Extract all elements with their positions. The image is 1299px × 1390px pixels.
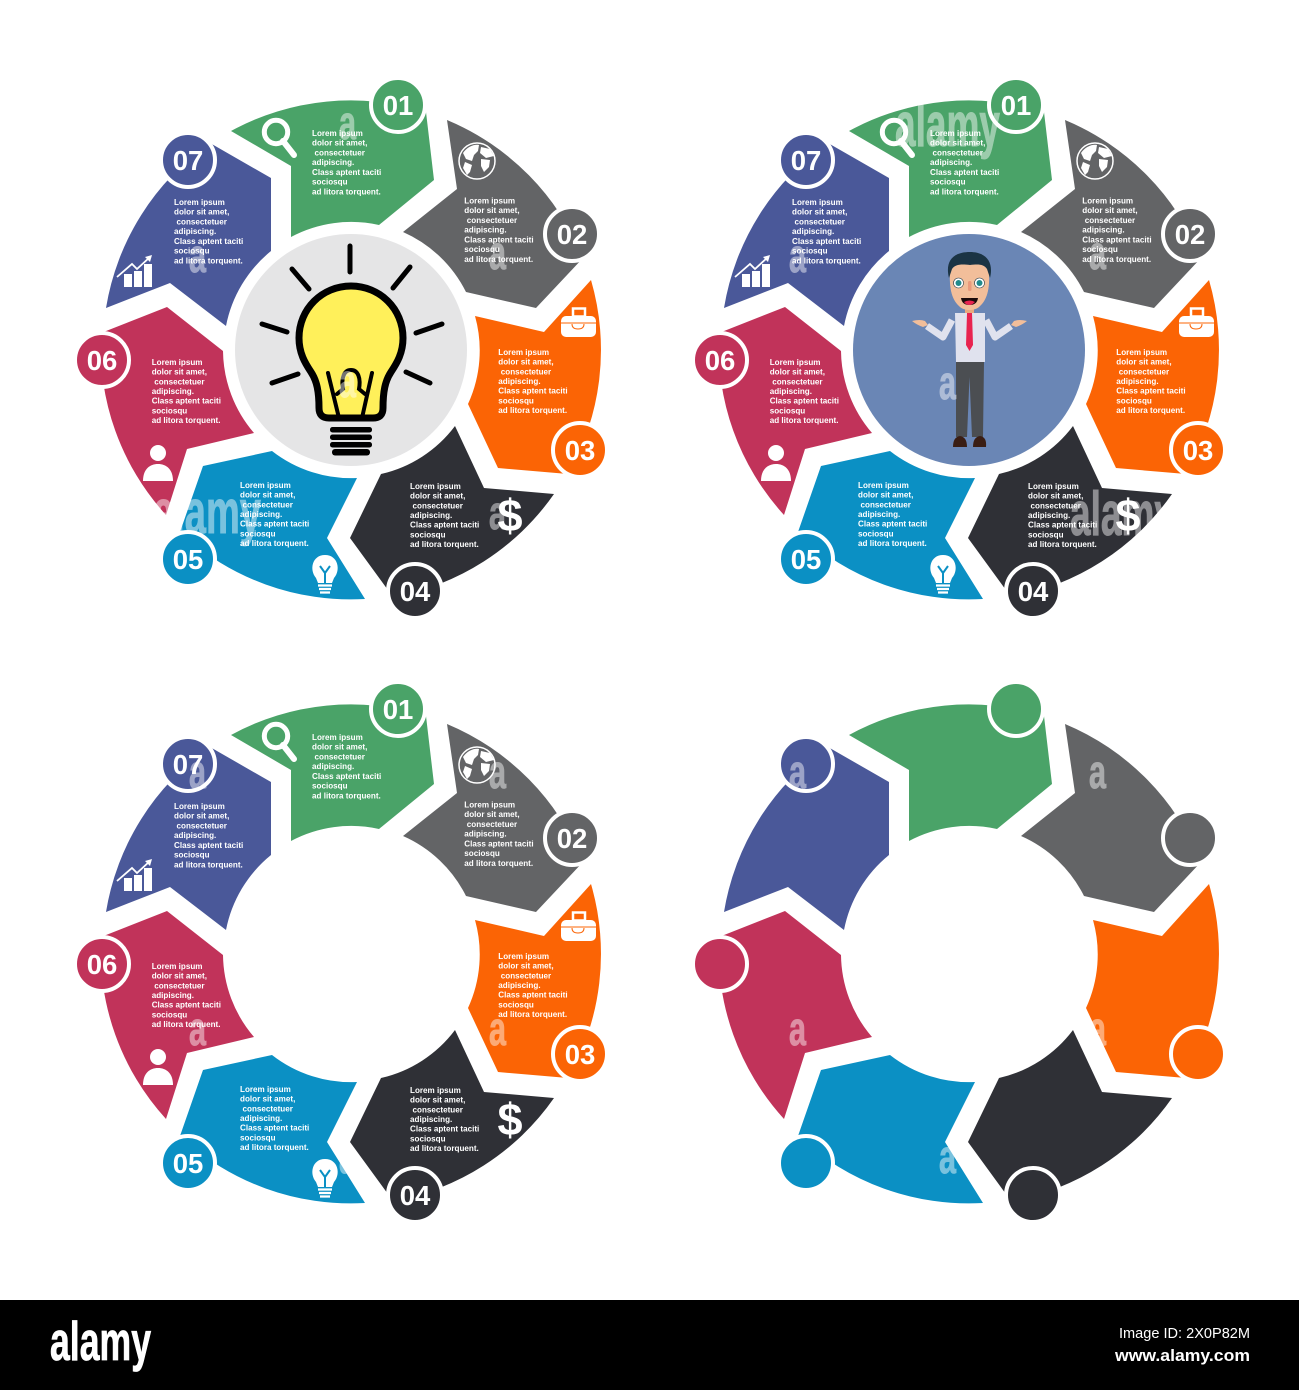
segment 03: ad litora torquent. xyxy=(498,406,567,415)
segment 02: sociosqu xyxy=(1082,245,1118,254)
segment 03: sociosqu xyxy=(498,1000,534,1009)
segment 01: ad litora torquent. xyxy=(312,187,381,196)
segment 06: ad litora torquent. xyxy=(152,416,220,425)
segment 05 xyxy=(161,451,365,599)
segment 05: consectetuer xyxy=(242,500,294,509)
segment 03: adipiscing. xyxy=(498,377,541,386)
stock photo watermarks: a xyxy=(489,745,507,798)
segment 04: $ xyxy=(497,1094,523,1145)
stock photo watermarks: a xyxy=(939,356,957,409)
segment 01: dolor sit amet, xyxy=(312,139,367,148)
segment 04: adipiscing. xyxy=(1028,511,1070,520)
segment 04: consectetuer xyxy=(412,501,464,510)
segment 05: adipiscing. xyxy=(240,1114,282,1123)
segment 06: dolor sit amet, xyxy=(152,368,207,377)
segment 03: dolor sit amet, xyxy=(498,962,554,971)
segment 06 xyxy=(693,307,872,515)
segment 01: consectetuer xyxy=(314,148,366,157)
segment 04: dolor sit amet, xyxy=(410,492,465,501)
segment 04: $ xyxy=(1115,490,1141,541)
segment 03: 03 xyxy=(565,435,595,466)
segment 07: Class aptent taciti xyxy=(792,237,861,246)
segment 07: ad litora torquent. xyxy=(792,256,861,265)
segment 01 xyxy=(231,78,434,237)
segment 03: consectetuer xyxy=(501,971,552,980)
diagram 1: ring with lightbulb centre xyxy=(75,78,607,618)
segment 03: sociosqu xyxy=(1116,396,1152,405)
segment 02: dolor sit amet, xyxy=(1082,206,1138,215)
centre disc with businessman xyxy=(853,234,1085,466)
segment 01: consectetuer xyxy=(932,148,984,157)
segment 04: dolor sit amet, xyxy=(1028,492,1083,501)
segment 01: Lorem ipsum xyxy=(312,129,363,138)
segment 02: 02 xyxy=(557,823,587,854)
segment 03: 03 xyxy=(1183,435,1213,466)
segment 06: dolor sit amet, xyxy=(152,972,207,981)
segment 01: adipiscing. xyxy=(312,762,354,771)
segment 02: ad litora torquent. xyxy=(1082,255,1151,264)
segment 05: adipiscing. xyxy=(240,510,282,519)
segment 02: ad litora torquent. xyxy=(464,255,533,264)
segment 01: Class aptent taciti xyxy=(930,168,999,177)
segment 06: adipiscing. xyxy=(770,387,812,396)
segment 06: 06 xyxy=(87,345,117,376)
segment 05: ad litora torquent. xyxy=(240,539,309,548)
stock photo watermarks: a xyxy=(189,229,207,282)
segment 02: adipiscing. xyxy=(464,226,507,235)
segment 06: ad litora torquent. xyxy=(770,416,838,425)
segment 04: Lorem ipsum xyxy=(1028,482,1079,491)
segment 02: Lorem ipsum xyxy=(1082,196,1133,206)
segment 07: dolor sit amet, xyxy=(174,208,229,217)
segment 06: sociosqu xyxy=(152,1010,187,1019)
segment 04: adipiscing. xyxy=(410,511,452,520)
segment 04: Lorem ipsum xyxy=(410,1086,461,1095)
segment 07: Class aptent taciti xyxy=(174,237,243,246)
segment 05: sociosqu xyxy=(858,529,894,538)
stock photo watermarks: a xyxy=(789,229,807,282)
segment 02: Class aptent taciti xyxy=(464,839,534,848)
centre disc with lightbulb xyxy=(235,234,467,466)
segment 01: Class aptent taciti xyxy=(312,772,381,781)
segment 03: consectetuer xyxy=(1119,367,1170,376)
segment 05: Class aptent taciti xyxy=(858,520,927,529)
segment 04: Lorem ipsum xyxy=(410,482,461,491)
segment 02: sociosqu xyxy=(464,245,500,254)
blank segment 06 xyxy=(693,911,872,1119)
segment 03: Class aptent taciti xyxy=(1116,387,1186,396)
diagram 3: ring with empty centre xyxy=(75,682,607,1222)
segment 04: sociosqu xyxy=(410,1134,446,1143)
segment 03: adipiscing. xyxy=(498,981,541,990)
footer band xyxy=(0,1300,1299,1390)
segment 06 xyxy=(75,911,254,1119)
stock photo watermarks: a xyxy=(939,1130,957,1183)
segment 07: Lorem ipsum xyxy=(792,198,843,207)
segment 01: ad litora torquent. xyxy=(312,791,381,800)
segment 04: 04 xyxy=(1018,576,1049,607)
segment 04: ad litora torquent. xyxy=(410,540,479,549)
segment 02 xyxy=(1021,120,1217,308)
segment 05: 05 xyxy=(173,1148,203,1179)
segment 07: Class aptent taciti xyxy=(174,841,243,850)
segment 07: ad litora torquent. xyxy=(174,860,243,869)
segment 04 xyxy=(968,426,1172,618)
segment 04 xyxy=(350,1030,554,1222)
segment 03: ad litora torquent. xyxy=(498,1010,567,1019)
blank segment 01 xyxy=(849,682,1052,841)
segment 05: 05 xyxy=(173,544,203,575)
segment 07: Lorem ipsum xyxy=(174,802,225,811)
segment 02: consectetuer xyxy=(1085,216,1136,225)
segment 04: $ xyxy=(497,490,523,541)
segment 07: sociosqu xyxy=(792,247,828,256)
segment 06 xyxy=(75,307,254,515)
segment 04: adipiscing. xyxy=(410,1115,452,1124)
segment 07: dolor sit amet, xyxy=(792,208,847,217)
segment 04: consectetuer xyxy=(412,1105,464,1114)
segment 03: 03 xyxy=(565,1039,595,1070)
segment 02: consectetuer xyxy=(467,216,518,225)
segment 05 xyxy=(779,451,983,599)
segment 06: sociosqu xyxy=(770,406,805,415)
segment 05: dolor sit amet, xyxy=(240,491,295,500)
segment 06: Lorem ipsum xyxy=(152,962,203,971)
segment 02: consectetuer xyxy=(467,820,518,829)
segment 01: 01 xyxy=(383,90,413,121)
segment 01: 01 xyxy=(1001,90,1031,121)
segment 03: ad litora torquent. xyxy=(1116,406,1185,415)
stock photo watermarks: a xyxy=(789,1002,807,1055)
segment 03: dolor sit amet, xyxy=(498,358,554,367)
stock photo watermarks: a xyxy=(189,745,207,798)
segment 04: consectetuer xyxy=(1030,501,1082,510)
segment 03: adipiscing. xyxy=(1116,377,1159,386)
segment 07: adipiscing. xyxy=(174,831,216,840)
stock photo watermarks: a xyxy=(339,96,357,149)
segment 04: sociosqu xyxy=(1028,530,1064,539)
segment 01: dolor sit amet, xyxy=(312,743,367,752)
image id: Image ID: 2X0P82M xyxy=(1119,1325,1250,1342)
segment 04: 04 xyxy=(400,576,431,607)
segment 07: 07 xyxy=(173,145,203,176)
stock photo watermarks: a xyxy=(1089,1002,1107,1055)
segment 03: sociosqu xyxy=(498,396,534,405)
segment 07: 07 xyxy=(173,749,203,780)
segment 02: Class aptent taciti xyxy=(464,235,534,244)
segment 01: adipiscing. xyxy=(930,158,972,167)
stock photo watermarks: alamy xyxy=(895,91,1000,160)
segment 01: Lorem ipsum xyxy=(930,129,981,138)
blank segment 02 xyxy=(1021,724,1217,912)
segment 02: ad litora torquent. xyxy=(464,859,533,868)
diagram 2: ring with businessman centre xyxy=(693,78,1225,618)
segment 04: 04 xyxy=(400,1180,431,1211)
segment 07: sociosqu xyxy=(174,851,210,860)
segment 06: adipiscing. xyxy=(152,387,194,396)
segment 01: sociosqu xyxy=(930,178,966,187)
segment 07: Lorem ipsum xyxy=(174,198,225,207)
blank segment 04 xyxy=(968,1030,1172,1222)
stock photo watermarks: a xyxy=(1089,226,1107,279)
segment 03: consectetuer xyxy=(501,367,552,376)
diagram 4: blank ring without text xyxy=(693,682,1225,1222)
stock photo watermarks: a xyxy=(339,354,357,407)
segment 02: Lorem ipsum xyxy=(464,196,515,206)
segment 06: Lorem ipsum xyxy=(152,358,203,367)
segment 03: Class aptent taciti xyxy=(498,387,568,396)
segment 07: consectetuer xyxy=(176,217,228,226)
segment 06: Class aptent taciti xyxy=(152,397,221,406)
segment 04: ad litora torquent. xyxy=(410,1144,479,1153)
segment 04: Class aptent taciti xyxy=(410,1125,479,1134)
stock photo watermarks: alamy xyxy=(1070,480,1175,549)
segment 01: 01 xyxy=(383,694,413,725)
stock photo watermarks: a xyxy=(489,226,507,279)
segment 02: adipiscing. xyxy=(1082,226,1125,235)
segment 07 xyxy=(724,133,889,326)
segment 06: Class aptent taciti xyxy=(770,397,839,406)
segment 05: Class aptent taciti xyxy=(240,1124,309,1133)
segment 02: Class aptent taciti xyxy=(1082,235,1152,244)
blank segment 05 xyxy=(779,1055,983,1203)
segment 05: adipiscing. xyxy=(858,510,900,519)
stock photo watermarks: a xyxy=(489,1002,507,1055)
segment 02 xyxy=(403,120,599,308)
segment 02: Lorem ipsum xyxy=(464,800,515,810)
segment 05 xyxy=(161,1055,365,1203)
blank segment 03 xyxy=(1086,884,1225,1081)
segment 03: dolor sit amet, xyxy=(1116,358,1172,367)
segment 06: consectetuer xyxy=(154,377,205,386)
segment 03: Lorem ipsum xyxy=(498,952,549,961)
stock photo watermarks: a xyxy=(189,1002,207,1055)
segment 01: dolor sit amet, xyxy=(930,139,985,148)
segment 02: 02 xyxy=(1175,219,1205,250)
segment 04: dolor sit amet, xyxy=(410,1096,465,1105)
segment 07 xyxy=(106,737,271,930)
segment 07: 07 xyxy=(791,145,821,176)
segment 07: adipiscing. xyxy=(792,227,834,236)
segment 05: 05 xyxy=(791,544,821,575)
segment 02 xyxy=(403,724,599,912)
segment 01: sociosqu xyxy=(312,178,348,187)
website: www.alamy.com xyxy=(1114,1346,1250,1365)
segment 03 xyxy=(468,884,607,1081)
footer logo: alamy xyxy=(50,1310,151,1372)
segment 05: ad litora torquent. xyxy=(240,1143,309,1152)
stock photo watermarks: a xyxy=(789,745,807,798)
segment 03: Lorem ipsum xyxy=(498,348,549,357)
segment 05: Lorem ipsum xyxy=(240,481,291,490)
segment 07: consectetuer xyxy=(794,217,846,226)
segment 02: 02 xyxy=(557,219,587,250)
segment 01: ad litora torquent. xyxy=(930,187,999,196)
segment 07: consectetuer xyxy=(176,821,228,830)
segment 07: sociosqu xyxy=(174,247,210,256)
segment 04: ad litora torquent. xyxy=(1028,540,1097,549)
segment 06: ad litora torquent. xyxy=(152,1020,220,1029)
segment 05: sociosqu xyxy=(240,529,276,538)
segment 06: 06 xyxy=(87,949,117,980)
segment 05: Lorem ipsum xyxy=(858,481,909,490)
segment 03 xyxy=(1086,280,1225,477)
segment 01: Lorem ipsum xyxy=(312,733,363,742)
segment 06: dolor sit amet, xyxy=(770,368,825,377)
stock photo watermarks: a xyxy=(1089,745,1107,798)
segment 07: dolor sit amet, xyxy=(174,812,229,821)
segment 04: Class aptent taciti xyxy=(1028,521,1097,530)
segment 05: Class aptent taciti xyxy=(240,520,309,529)
segment 04: Class aptent taciti xyxy=(410,521,479,530)
segment 06: sociosqu xyxy=(152,406,187,415)
segment 03: Class aptent taciti xyxy=(498,991,568,1000)
segment 05: dolor sit amet, xyxy=(858,491,913,500)
stock photo watermarks xyxy=(153,91,1175,1183)
stock photo watermarks: a xyxy=(489,486,507,539)
segment 01: Class aptent taciti xyxy=(312,168,381,177)
segment 07 xyxy=(106,133,271,326)
segment 05: consectetuer xyxy=(242,1104,294,1113)
segment 01 xyxy=(231,682,434,841)
segment 07: adipiscing. xyxy=(174,227,216,236)
segment 01: adipiscing. xyxy=(312,158,354,167)
segment 01 xyxy=(849,78,1052,237)
segment 06: Lorem ipsum xyxy=(770,358,821,367)
segment 06: 06 xyxy=(705,345,735,376)
segment 03 xyxy=(468,280,607,477)
segment 06: Class aptent taciti xyxy=(152,1001,221,1010)
segment 04 xyxy=(350,426,554,618)
segment 01: consectetuer xyxy=(314,752,366,761)
segment 06: consectetuer xyxy=(772,377,823,386)
segment 06: consectetuer xyxy=(154,981,205,990)
segment 01: sociosqu xyxy=(312,782,348,791)
segment 05: Lorem ipsum xyxy=(240,1085,291,1094)
segment 05: ad litora torquent. xyxy=(858,539,927,548)
segment 05: sociosqu xyxy=(240,1133,276,1142)
segment 05: dolor sit amet, xyxy=(240,1095,295,1104)
stock photo watermarks: a xyxy=(339,1130,357,1183)
stock photo watermarks: alamy xyxy=(153,478,261,547)
segment 04: sociosqu xyxy=(410,530,446,539)
segment 02: sociosqu xyxy=(464,849,500,858)
segment 02: dolor sit amet, xyxy=(464,810,520,819)
blank segment 07 xyxy=(724,737,889,930)
segment 03: Lorem ipsum xyxy=(1116,348,1167,357)
segment 02: dolor sit amet, xyxy=(464,206,520,215)
segment 05: consectetuer xyxy=(860,500,912,509)
segment 07: ad litora torquent. xyxy=(174,256,243,265)
segment 06: adipiscing. xyxy=(152,991,194,1000)
segment 02: adipiscing. xyxy=(464,830,507,839)
